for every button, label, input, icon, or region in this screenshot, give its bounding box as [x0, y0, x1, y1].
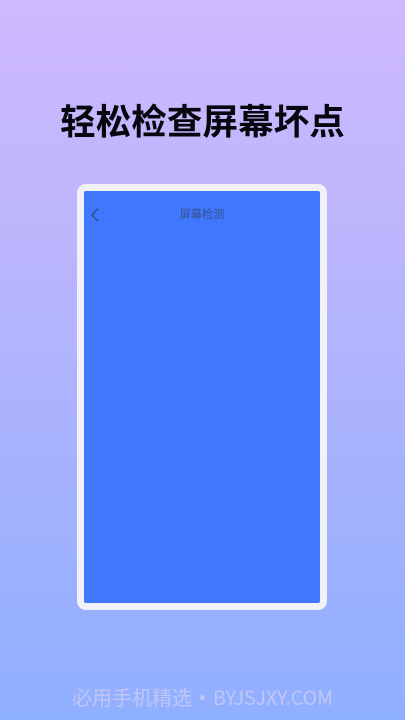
footer watermark: BYJSJXY.COM: [213, 682, 333, 711]
screen heading: 屏幕检测: [180, 208, 224, 220]
footer watermark: 必用手机精选: [72, 682, 192, 711]
icon: back arrow: [91, 208, 98, 222]
phone frame: [77, 184, 327, 610]
title: 轻松检查屏幕坏点: [60, 102, 345, 142]
footer watermark: [72, 682, 333, 711]
phone screen: [84, 191, 320, 603]
